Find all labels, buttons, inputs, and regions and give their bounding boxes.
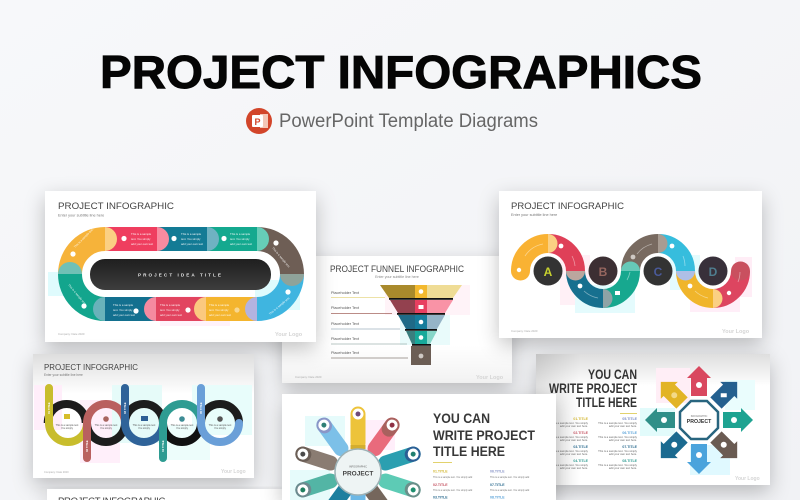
- funnel labels: Placeholder Text: [331, 351, 360, 355]
- funnel labels: Placeholder Text: [331, 291, 360, 295]
- stadium segment text: text. You simply: [181, 237, 201, 241]
- stadium segment text: text. You simply: [160, 308, 180, 312]
- heading: octagon: WRITE PROJECT: [549, 381, 638, 396]
- panel: stadium infographic: Enter your subtitle line here: [58, 214, 104, 218]
- octagon text columns: 01.TITLE: [573, 417, 589, 421]
- octagon text columns: This is a sample text. You simply: [549, 449, 589, 453]
- central title bar: PROJECT IDEA TITLE: [138, 272, 221, 278]
- bar labels: 02 TITLE: [85, 440, 89, 452]
- octagon text columns: add your own text here.: [609, 424, 637, 428]
- octagon text columns: This is a sample text. You simply: [598, 421, 638, 425]
- bar labels: [47, 402, 203, 452]
- ring icons and text: This is a sample text: [95, 424, 118, 427]
- wave text strokes: [525, 244, 740, 298]
- octagon text columns: 02.TITLE: [573, 431, 589, 435]
- linked rings: [48, 388, 239, 458]
- ring icons and text: You simply: [176, 427, 189, 430]
- radial text columns: This is a sample text. You simply add: [433, 476, 473, 479]
- node D: D: [709, 265, 718, 279]
- ring icons and text: You simply: [61, 427, 74, 430]
- radial hub: INFOGRAPHIC: [349, 464, 367, 468]
- heading: radial: TITLE HERE: [433, 444, 505, 460]
- radial spokes: [293, 406, 423, 500]
- octagon text columns: add your own text here.: [609, 438, 637, 442]
- octagon text columns: This is a sample text. You simply: [598, 449, 638, 453]
- funnel labels: [331, 291, 408, 358]
- ring icons and text: You simply: [100, 427, 113, 430]
- panel: funnel infographic: Company: Date 2020: [295, 375, 322, 379]
- stadium segment text: This is a sample text.: [67, 283, 87, 306]
- panel: wave infographic: Your Logo: [722, 329, 750, 335]
- stadium icons: [70, 236, 291, 314]
- ring icons and text: This is a sample text: [56, 424, 79, 427]
- panel: wave infographic: [499, 191, 762, 338]
- stadium segment text: [67, 227, 291, 317]
- heading: stadium: PROJECT INFOGRAPHIC: [58, 201, 174, 212]
- panel: stadium infographic: [45, 191, 316, 342]
- panel: radial spokes infographic: [282, 394, 556, 500]
- octagon text columns: This is a sample text. You simply: [549, 435, 589, 439]
- stadium segment text: text. You simply: [230, 237, 250, 241]
- wave joints: [548, 234, 722, 308]
- panel: stadium infographic: Company: Date 2020: [58, 332, 85, 336]
- funnel labels: Placeholder Text: [331, 306, 360, 310]
- panel: linked circles infographic: Company: Date 2020: [44, 470, 69, 474]
- ring icons and text: This is a sample text: [133, 424, 156, 427]
- ring icons and text: This is a sample text: [171, 424, 194, 427]
- ring icons and text: You simply: [214, 427, 227, 430]
- bar labels: 05 TITLE: [199, 402, 203, 414]
- stadium segment text: add your own text: [113, 313, 135, 317]
- stadium segment text: text. You simply: [131, 237, 151, 241]
- ring icons and text: This is a sample text: [209, 424, 232, 427]
- node D: [698, 256, 728, 286]
- octagon text columns: add your own text here.: [560, 438, 588, 442]
- octagon text columns: add your own text here.: [560, 452, 588, 456]
- radial text columns: This is a sample text. You simply add: [490, 489, 530, 492]
- panel: linked circles infographic: Enter your subtitle line here: [44, 373, 83, 377]
- bar labels: 04 TITLE: [161, 440, 165, 452]
- panel: octagon arrows infographic: Your Logo: [735, 476, 760, 482]
- octagon text columns: 04.TITLE: [573, 459, 589, 463]
- subtitle: PowerPoint Template Diagrams: [279, 111, 538, 132]
- octagon text columns: 03.TITLE: [573, 445, 589, 449]
- stadium segment text: This is a sample: [131, 232, 152, 236]
- octagon text columns: add your own text here.: [609, 452, 637, 456]
- octagon text columns: 06.TITLE: [622, 431, 638, 435]
- stadium segment text: text. You simply: [209, 308, 229, 312]
- radial text columns: This is a sample text. You simply add: [490, 476, 530, 479]
- node B: [588, 256, 618, 286]
- octagon text columns: This is a sample text. You simply: [598, 463, 638, 467]
- radial text columns: 03.TITLE: [433, 496, 448, 500]
- stadium segment text: add your own text: [230, 242, 252, 246]
- octagon hub: PROJECT: [687, 419, 712, 425]
- radial text columns: This is a sample text. You simply add: [433, 489, 473, 492]
- octagon text columns: add your own text here.: [560, 424, 588, 428]
- stadium segment text: This is a sample text.: [268, 296, 291, 316]
- radial text columns: 08.TITLE: [490, 496, 505, 500]
- octagon text columns: [549, 414, 638, 470]
- panel: wave infographic: Company: Date 2020: [511, 329, 538, 333]
- node B: B: [599, 265, 608, 279]
- radial text columns: 06.TITLE: [490, 470, 505, 474]
- heading: radial: WRITE PROJECT: [433, 428, 535, 444]
- panel: clipped bottom card: [47, 489, 287, 500]
- node A: A: [544, 265, 553, 279]
- stadium segment text: add your own text: [209, 313, 231, 317]
- heading: octagon: TITLE HERE: [576, 395, 637, 410]
- node C: [644, 256, 672, 286]
- heading: funnel: PROJECT FUNNEL INFOGRAPHIC: [330, 264, 464, 275]
- radial hub: [335, 449, 381, 495]
- stadium segment text: add your own text: [181, 242, 203, 246]
- octagon arrows: [645, 366, 753, 474]
- heading: radial: YOU CAN: [433, 411, 490, 427]
- icon: PowerPoint logo: P: [254, 117, 261, 127]
- stadium segment text: This is a sample: [181, 232, 202, 236]
- node A: [534, 256, 562, 286]
- ring icons and text: You simply: [138, 427, 151, 430]
- funnel labels: Placeholder Text: [331, 337, 360, 341]
- stadium segment text: add your own text: [160, 313, 182, 317]
- stadium ring: [70, 239, 292, 309]
- panel: stadium infographic: Your Logo: [275, 332, 303, 338]
- node C: C: [654, 265, 663, 279]
- octagon text columns: 07.TITLE: [622, 445, 638, 449]
- wave band: [511, 244, 750, 298]
- bar labels: 03 TITLE: [123, 402, 127, 414]
- stadium segment text: This is a sample text.: [73, 227, 94, 249]
- icon: PowerPoint logo: [246, 108, 272, 134]
- octagon text columns: 05.TITLE: [622, 417, 638, 421]
- heading: octagon: YOU CAN: [588, 367, 637, 382]
- stadium segment text: add your own text: [131, 242, 153, 246]
- stadium segment text: This is a sample: [113, 303, 134, 307]
- stadium segment text: This is a sample: [230, 232, 251, 236]
- stadium segment text: This is a sample: [160, 303, 181, 307]
- bar labels: 01 TITLE: [47, 402, 51, 414]
- octagon hub: INFOGRAPHIC: [691, 415, 708, 418]
- panel: funnel infographic: [282, 256, 512, 383]
- stadium joints: [58, 227, 304, 321]
- octagon text columns: add your own text here.: [609, 466, 637, 470]
- funnel labels: Placeholder Text: [331, 322, 360, 326]
- heading: radial: [433, 411, 535, 460]
- panel: wave infographic: Enter your subtitle line here: [511, 213, 557, 217]
- panel: funnel infographic: Your Logo: [476, 375, 504, 381]
- ring icons and text: [56, 414, 232, 430]
- octagon text columns: This is a sample text. You simply: [549, 463, 589, 467]
- radial text columns: 07.TITLE: [490, 483, 505, 487]
- title: PROJECT INFOGRAPHICS: [100, 46, 702, 98]
- radial hub: PROJECT: [343, 470, 373, 478]
- wave icons: [517, 244, 731, 295]
- octagon text columns: add your own text here.: [560, 466, 588, 470]
- radial text columns: [433, 470, 530, 500]
- panel: linked circles infographic: Your Logo: [221, 469, 246, 475]
- stadium segment text: This is a sample text.: [271, 246, 291, 269]
- panel: linked circles infographic: [33, 354, 254, 478]
- octagon text columns: 08.TITLE: [622, 459, 638, 463]
- panel: octagon arrows infographic: [536, 354, 770, 485]
- octagon hub: [680, 401, 718, 439]
- octagon text columns: This is a sample text. You simply: [598, 435, 638, 439]
- radial text columns: 02.TITLE: [433, 483, 448, 487]
- stadium segment text: text. You simply: [113, 308, 133, 312]
- heading: octagon: [549, 367, 638, 410]
- funnel chart: [380, 285, 462, 365]
- octagon text columns: This is a sample text. You simply: [549, 421, 589, 425]
- central title bar: [90, 259, 271, 290]
- heading: linked circles: PROJECT INFOGRAPHIC: [44, 363, 138, 372]
- heading: wave: PROJECT INFOGRAPHIC: [511, 201, 624, 212]
- stadium segment text: This is a sample: [209, 303, 230, 307]
- radial text columns: 01.TITLE: [433, 470, 448, 474]
- panel: funnel infographic: Enter your subtitle line here: [375, 275, 419, 279]
